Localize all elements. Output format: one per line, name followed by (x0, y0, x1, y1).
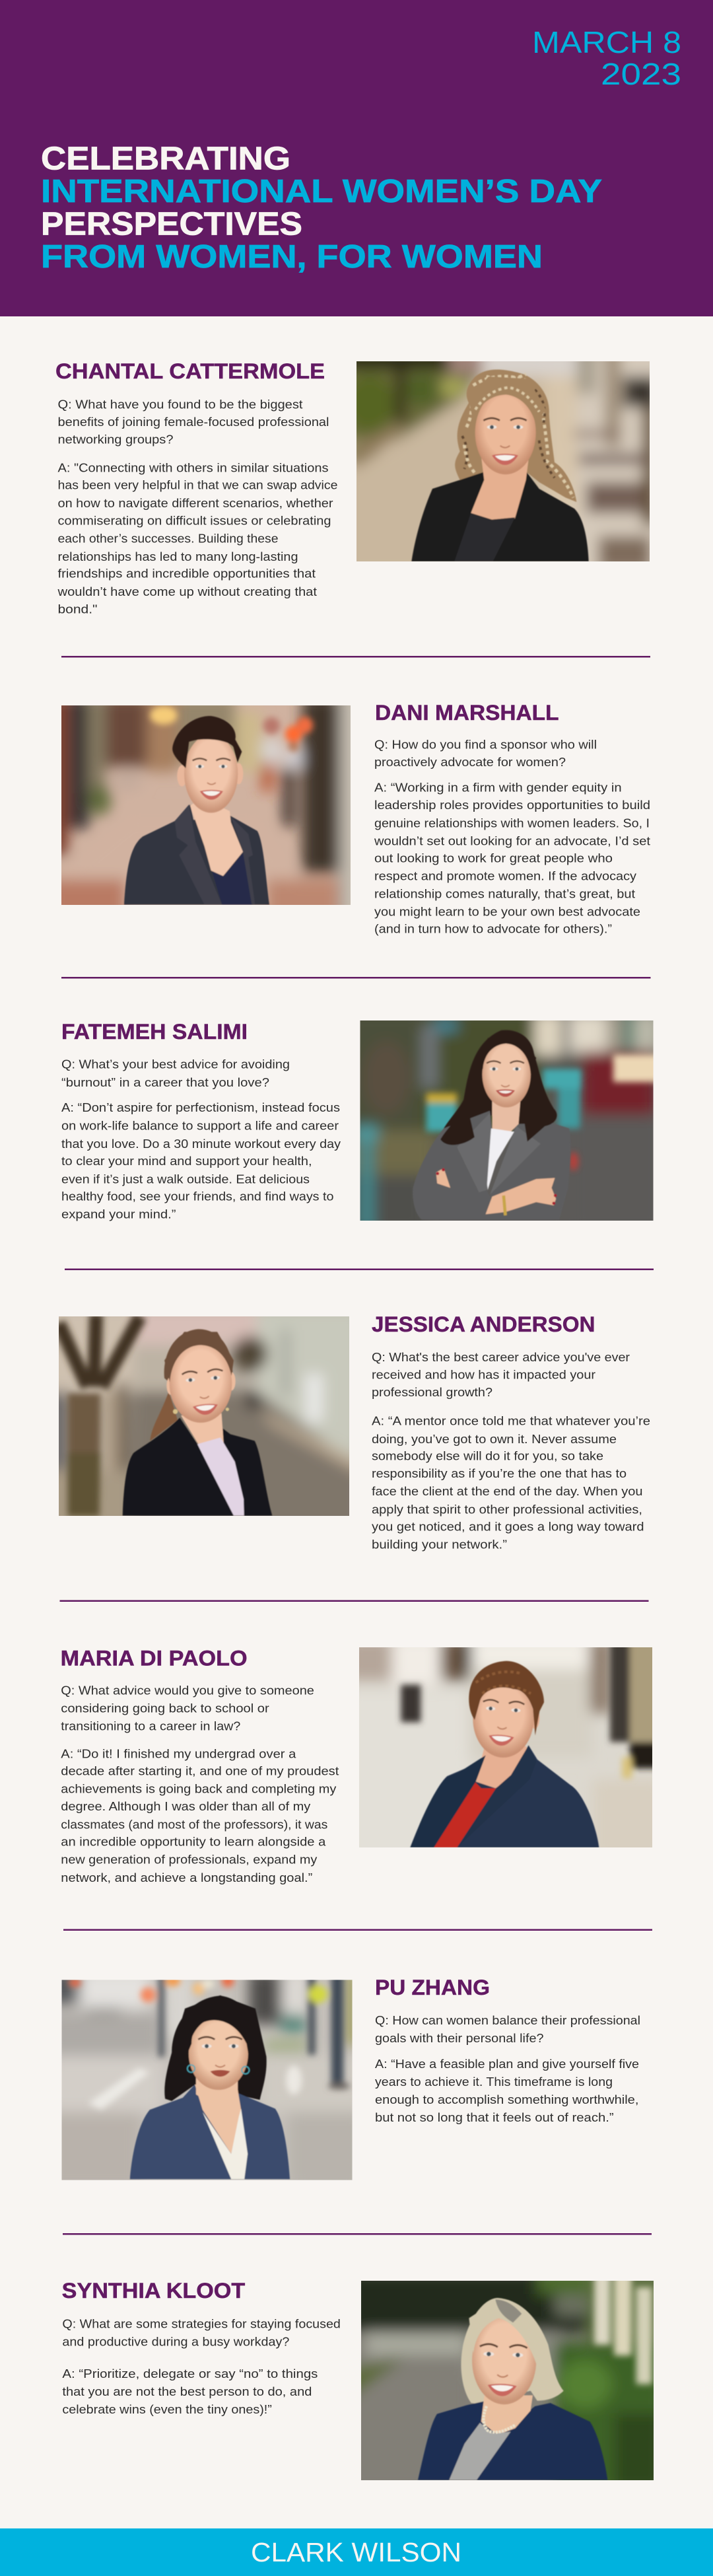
answer (57, 461, 337, 616)
question: “burnout” in a career that you love? (61, 1076, 269, 1089)
top (454, 513, 515, 561)
answer: on work-life balance to support a life and career (61, 1119, 339, 1132)
earrings (173, 1409, 178, 1414)
question: Q: What advice would you give to someone (61, 1684, 314, 1698)
answer: you might learn to be your own best advocate (374, 905, 640, 918)
date: MARCH 8 (532, 25, 681, 59)
question: Q: What are some strategies for staying focused (62, 2318, 341, 2331)
answer: new generation of professionals, expand my (61, 1853, 317, 1866)
title: PERSPECTIVES (41, 206, 302, 242)
hair (455, 370, 576, 502)
face (473, 1680, 533, 1758)
jacket (410, 1745, 599, 1847)
ears (177, 766, 187, 787)
answer (62, 2367, 318, 2416)
photo: Dani Marshall (61, 705, 351, 905)
panel: Fatemeh Salimi (61, 1012, 664, 1234)
forehead hair (477, 1034, 536, 1073)
face (170, 1344, 232, 1423)
ponytail (150, 1391, 178, 1441)
neck and chest (190, 798, 243, 876)
title: FROM WOMEN, FOR WOMEN (41, 239, 543, 275)
answer: on how to navigate different scenarios, whether (58, 497, 333, 510)
panel: Pu Zhang (49, 1971, 640, 2192)
answer: that you are not the best person to do, and (62, 2385, 312, 2398)
name heading: SYNTHIA KLOOT (62, 2279, 246, 2303)
date: 2023 (601, 57, 681, 91)
forehead hair (172, 1995, 267, 2057)
answer: achievements is going back and completing my (61, 1782, 336, 1795)
question: benefits of joining female-focused professional (58, 415, 329, 429)
red shirt (434, 1781, 496, 1847)
name heading: FATEMEH SALIMI (61, 1020, 248, 1044)
earrings (187, 2065, 195, 2073)
answer: even if it’s just a walk outside. Eat delicious (61, 1173, 310, 1186)
answer: out looking to work for great people who (374, 852, 613, 865)
lapels (410, 1755, 486, 1847)
photo: Maria Di Paolo (359, 1647, 652, 1847)
question: considering going back to school or (61, 1701, 269, 1715)
answer: building your network.” (372, 1538, 507, 1551)
name heading: MARIA DI PAOLO (61, 1647, 248, 1670)
answer: enough to accomplish something worthwhile, (375, 2093, 638, 2106)
answer: A: "Connecting with others in similar situations (58, 461, 329, 474)
photo: Chantal Cattermole (356, 361, 650, 561)
question: received and how has it impacted your (372, 1368, 595, 1381)
hair locks over blazer (440, 1108, 555, 1145)
neck (492, 1095, 521, 1137)
answer (61, 1101, 341, 1221)
answer: respect and promote women. If the advocacy (374, 869, 636, 882)
question (374, 738, 597, 769)
question (62, 2318, 341, 2349)
answer (375, 2057, 639, 2124)
hair (172, 716, 242, 768)
answer (61, 1747, 339, 1884)
question: Q: What's the best career advice you've ever (372, 1351, 630, 1364)
question: professional growth? (372, 1386, 492, 1399)
jacket (411, 471, 589, 561)
face (189, 2017, 248, 2090)
forehead hair (469, 376, 546, 425)
face (475, 391, 536, 474)
footer logo text: CLARK WILSON (251, 2537, 461, 2567)
jacket (124, 805, 269, 905)
answer: A: “Working in a firm with gender equity in (374, 781, 622, 794)
divider 4 (59, 1600, 648, 1602)
panel: Jessica Anderson (46, 1308, 650, 1551)
answer: celebrate wins (even the tiny ones)!” (62, 2403, 272, 2416)
question: transitioning to a career in law? (61, 1719, 240, 1733)
blazer (413, 1111, 570, 1220)
hair (440, 1030, 557, 1145)
question: Q: What’s your best advice for avoiding (61, 1057, 290, 1071)
ears (166, 1377, 176, 1395)
title (41, 141, 602, 275)
question: networking groups? (58, 433, 173, 447)
gray top (449, 2423, 511, 2480)
date (532, 25, 681, 91)
answer: apply that spirit to other professional activities, (372, 1503, 642, 1517)
answer: A: “A mentor once told me that whatever you’re (372, 1415, 650, 1428)
answer: each other’s successes. Building these (58, 532, 279, 545)
panel: Chantal Cattermole (55, 348, 665, 616)
question (375, 2014, 640, 2045)
face (184, 734, 238, 813)
back hair (164, 1329, 232, 1387)
title: CELEBRATING (41, 141, 290, 177)
answer: healthy food, see your friends, and find ways to (61, 1190, 334, 1203)
ear (530, 1707, 539, 1729)
answer: but not so long that it feels out of reach.” (375, 2111, 614, 2124)
title: INTERNATIONAL WOMEN’S DAY (41, 174, 602, 209)
answer: years to achieve it. This timeframe is long (375, 2075, 613, 2089)
answer: expand your mind.” (61, 1207, 176, 1221)
divider 2 (61, 977, 651, 979)
divider 3 (65, 1268, 654, 1270)
answer: degree. Although I was older than all of my (61, 1800, 310, 1813)
answer: wouldn’t set out looking for an advocate, I’d set (374, 834, 650, 847)
question (58, 398, 329, 447)
photo: Synthia Kloot (361, 2281, 654, 2480)
photo: Pu Zhang (62, 1980, 353, 2180)
answer: network, and achieve a longstanding goal.” (61, 1871, 312, 1884)
hair (461, 2298, 564, 2404)
answer: has been very helpful in that we can swap advice (58, 478, 337, 491)
name heading: CHANTAL CATTERMOLE (55, 359, 325, 383)
panel: Maria Di Paolo (61, 1639, 663, 1884)
lapels (175, 805, 222, 905)
question: and productive during a busy workday? (62, 2336, 289, 2349)
question: proactively advocate for women? (374, 756, 566, 769)
shirt (197, 1437, 244, 1516)
answer: decade after starting it, and one of my proudest (61, 1765, 339, 1778)
answer: doing, you’ve got to own it. Never assume (372, 1433, 617, 1446)
question (372, 1351, 630, 1399)
answer: responsibility as if you’re the one that has to (372, 1467, 627, 1480)
answer: wouldn’t have come up without creating that (57, 585, 317, 598)
answer (374, 781, 650, 936)
answer: that you love. Do a 30 minute workout every day (61, 1137, 341, 1151)
answer: A: “Don’t aspire for perfectionism, instead focus (61, 1101, 340, 1114)
divider 1 (61, 656, 650, 658)
answer: you get noticed, and it goes a long way toward (372, 1521, 644, 1534)
forehead hair (469, 2299, 544, 2367)
question (61, 1057, 290, 1089)
answer: classmates (and most of the professors), it was (61, 1818, 327, 1831)
answer: bond." (58, 603, 98, 616)
hair (469, 1661, 544, 1735)
neck (181, 1413, 224, 1464)
neck and chest (476, 1746, 529, 1788)
answer (372, 1415, 650, 1551)
forehead hair (164, 1332, 234, 1382)
panel: Synthia Kloot (62, 2272, 665, 2492)
answer: A: “Do it! I finished my undergrad over a (61, 1747, 296, 1760)
face (482, 1042, 531, 1108)
answer: friendships and incredible opportunities that (58, 567, 316, 580)
photo: Jessica Anderson (59, 1316, 349, 1516)
top (212, 853, 253, 905)
name heading: DANI MARSHALL (375, 701, 559, 725)
crossed arms (486, 1178, 556, 1214)
shirt (486, 1128, 514, 1190)
jacket (123, 1417, 272, 1516)
footer bar (0, 2528, 713, 2576)
answer: face the client at the end of the day. When you (372, 1485, 643, 1498)
photo: Fatemeh Salimi (360, 1020, 654, 1221)
header banner (0, 0, 713, 316)
lapels (457, 1113, 541, 1194)
question: Q: How can women balance their professional (375, 2014, 640, 2027)
answer: somebody else will do it for you, so take (372, 1449, 603, 1462)
answer: genuine relationships with women leaders. So, I (374, 817, 650, 830)
jacket (130, 2085, 290, 2179)
neck (481, 2395, 533, 2435)
jacket (418, 2401, 607, 2480)
answer: an incredible opportunity to learn alongside a (61, 1836, 326, 1849)
face (472, 2316, 536, 2404)
neck and chest (470, 445, 530, 556)
answer: commiserating on difficult issues or celebrating (58, 515, 331, 528)
answer: (and in turn how to advocate for others).” (374, 923, 612, 936)
question: Q: How do you find a sponsor who will (374, 738, 597, 751)
divider 5 (63, 1929, 652, 1931)
answer: leadership roles provides opportunities to build (374, 799, 650, 812)
panel: Dani Marshall (48, 697, 650, 936)
pearl necklace (483, 2406, 515, 2432)
name heading: JESSICA ANDERSON (372, 1312, 595, 1336)
answer: A: “Have a feasible plan and give yourself five (375, 2057, 639, 2071)
neck and chest (195, 2085, 241, 2154)
answer: A: “Prioritize, delegate or say “no” to things (62, 2367, 318, 2380)
answer: relationships has led to many long-lasting (58, 550, 298, 563)
name heading: PU ZHANG (375, 1976, 490, 1999)
hair (164, 1996, 267, 2101)
question: goals with their personal life? (375, 2032, 544, 2045)
divider 6 (63, 2233, 652, 2235)
question: Q: What have you found to be the biggest (58, 398, 302, 411)
shirt (203, 2108, 248, 2179)
question (61, 1684, 314, 1733)
answer: relationship comes naturally, that’s great, but (374, 888, 635, 901)
answer: to clear your mind and support your health, (61, 1155, 312, 1168)
